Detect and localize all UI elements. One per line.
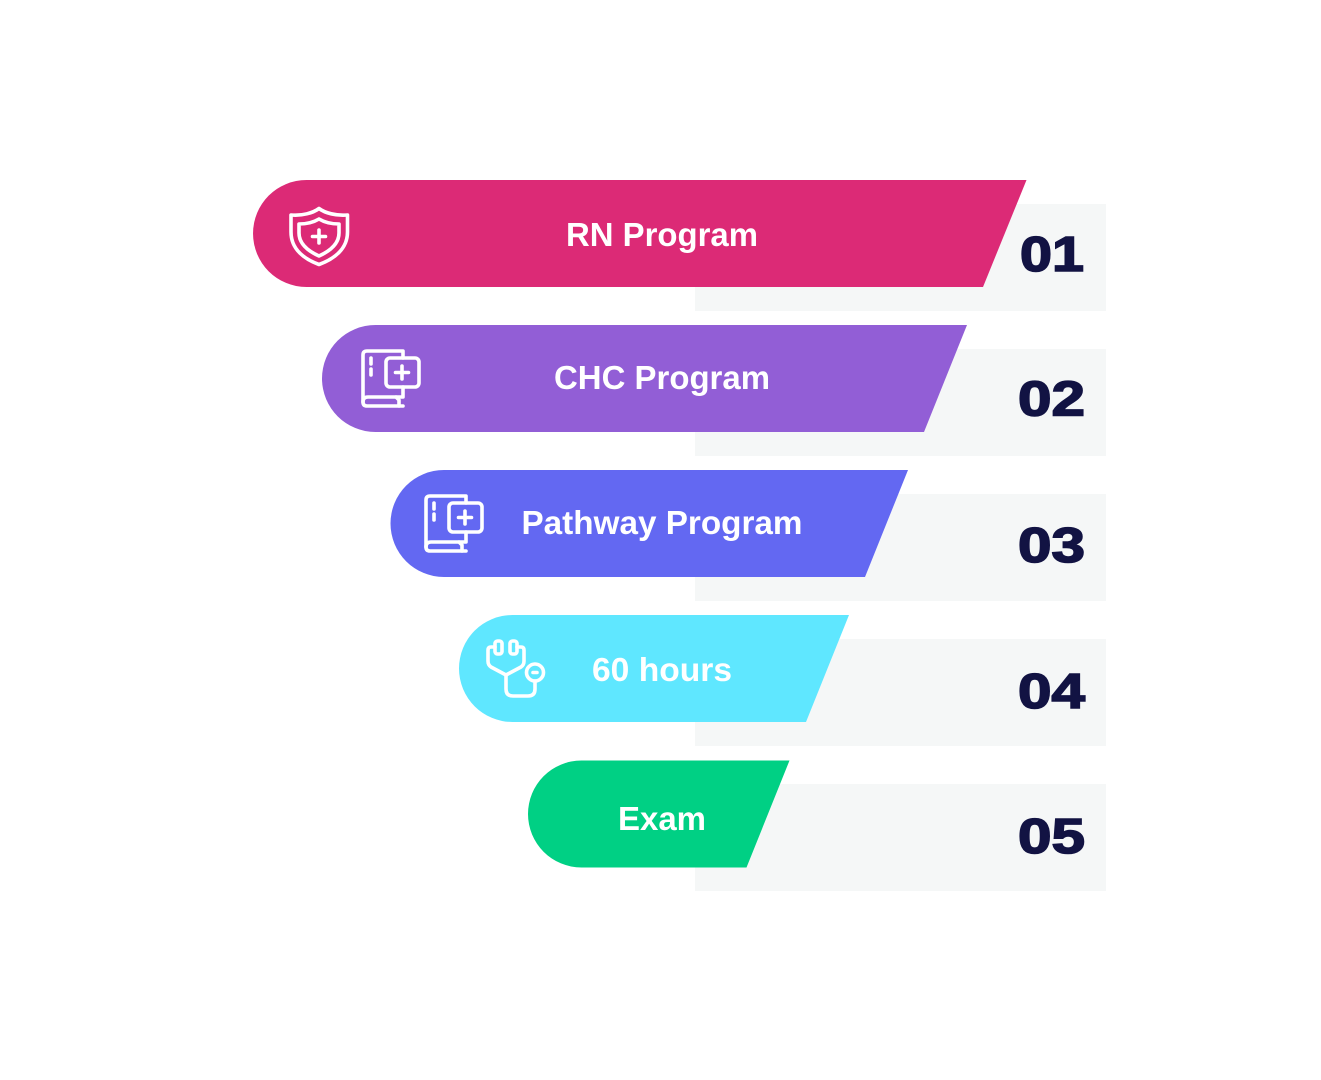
label: Pathway Program: Pathway Program <box>522 504 802 541</box>
icon: stethoscope <box>488 641 544 696</box>
number 03: 03 <box>1018 519 1085 573</box>
banner: Pathway Program <box>390 470 908 577</box>
number 01: 01 <box>1020 228 1084 282</box>
number 04: 04 <box>1018 665 1085 719</box>
number panel 04 <box>695 639 1106 746</box>
label: Exam: Exam <box>618 800 706 837</box>
banner: RN Program <box>253 180 1026 287</box>
banner: 60 hours <box>459 615 849 722</box>
step 03 <box>390 470 1106 601</box>
step 04 <box>459 615 1106 746</box>
label: CHC Program: CHC Program <box>554 359 770 396</box>
number panel 03 <box>695 494 1106 601</box>
number panel 02 <box>695 349 1106 456</box>
banner: CHC Program <box>322 325 967 432</box>
number panel 01 <box>695 204 1106 311</box>
number 02: 02 <box>1018 372 1085 426</box>
step 05 <box>528 760 1106 891</box>
icon: shield with cross <box>291 208 348 264</box>
banner: Exam <box>528 760 790 868</box>
label: 60 hours: 60 hours <box>592 651 732 688</box>
icon: medical book <box>363 351 419 406</box>
step 01 <box>253 180 1106 311</box>
number panel 05 <box>695 784 1106 891</box>
icon: medical book <box>426 496 482 551</box>
number 05: 05 <box>1018 810 1085 864</box>
label: RN Program: RN Program <box>566 216 758 253</box>
step 02 <box>322 325 1106 456</box>
